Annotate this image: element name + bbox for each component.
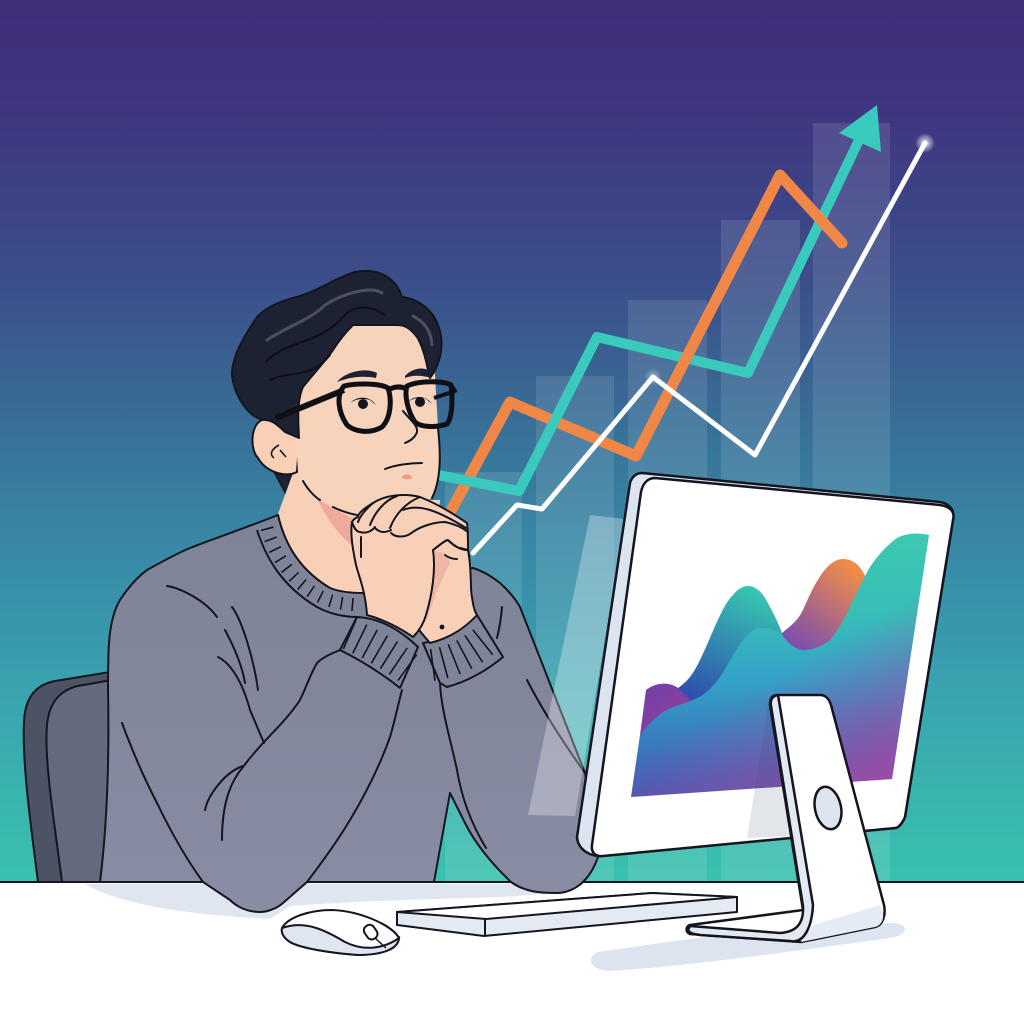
eyes — [350, 397, 432, 409]
purple tint of front area — [631, 534, 929, 797]
rising line chart — [438, 105, 935, 553]
stand shadow on desk — [591, 923, 905, 971]
right hand — [418, 540, 477, 643]
monitor body — [577, 473, 953, 856]
finger lines — [352, 496, 468, 559]
computer mouse — [282, 910, 399, 955]
area chart on screen — [631, 534, 929, 797]
sweater collar ribbing — [257, 528, 358, 617]
stand shadow on screen — [747, 705, 815, 838]
left sweater cuff — [340, 617, 418, 688]
back hair below ear — [272, 440, 300, 498]
teal line with arrow — [438, 105, 881, 491]
orange middle peak — [782, 559, 867, 660]
purple back layer — [640, 684, 698, 735]
office chair — [24, 672, 112, 882]
desktop monitor — [577, 473, 953, 856]
glasses — [276, 382, 455, 431]
face — [296, 320, 440, 515]
sweater fold lines — [122, 586, 585, 882]
blush mark — [402, 474, 412, 480]
clasped hands — [351, 495, 477, 643]
neck shadow — [317, 499, 353, 545]
jaw and face contour — [303, 428, 440, 516]
neck and chest — [272, 465, 440, 610]
sweater body — [100, 515, 598, 912]
keyboard — [397, 893, 737, 936]
nose and mouth — [385, 411, 422, 469]
cable hole — [811, 784, 845, 832]
ear — [252, 418, 300, 474]
translucent bar chart — [445, 123, 890, 882]
monitor front face — [592, 478, 953, 856]
desk — [0, 882, 1024, 1024]
eyebrows — [337, 369, 431, 382]
monitor stand — [591, 695, 905, 971]
front area — [631, 534, 929, 797]
right sweater cuff — [423, 615, 503, 687]
orange line — [447, 175, 842, 518]
left hand — [351, 495, 468, 637]
person — [100, 271, 598, 912]
hair — [232, 271, 442, 438]
translucent reflection panel — [528, 515, 625, 816]
teal line front segment — [438, 337, 597, 491]
teal middle peak — [678, 586, 784, 700]
white line with glowing tip — [473, 133, 935, 553]
